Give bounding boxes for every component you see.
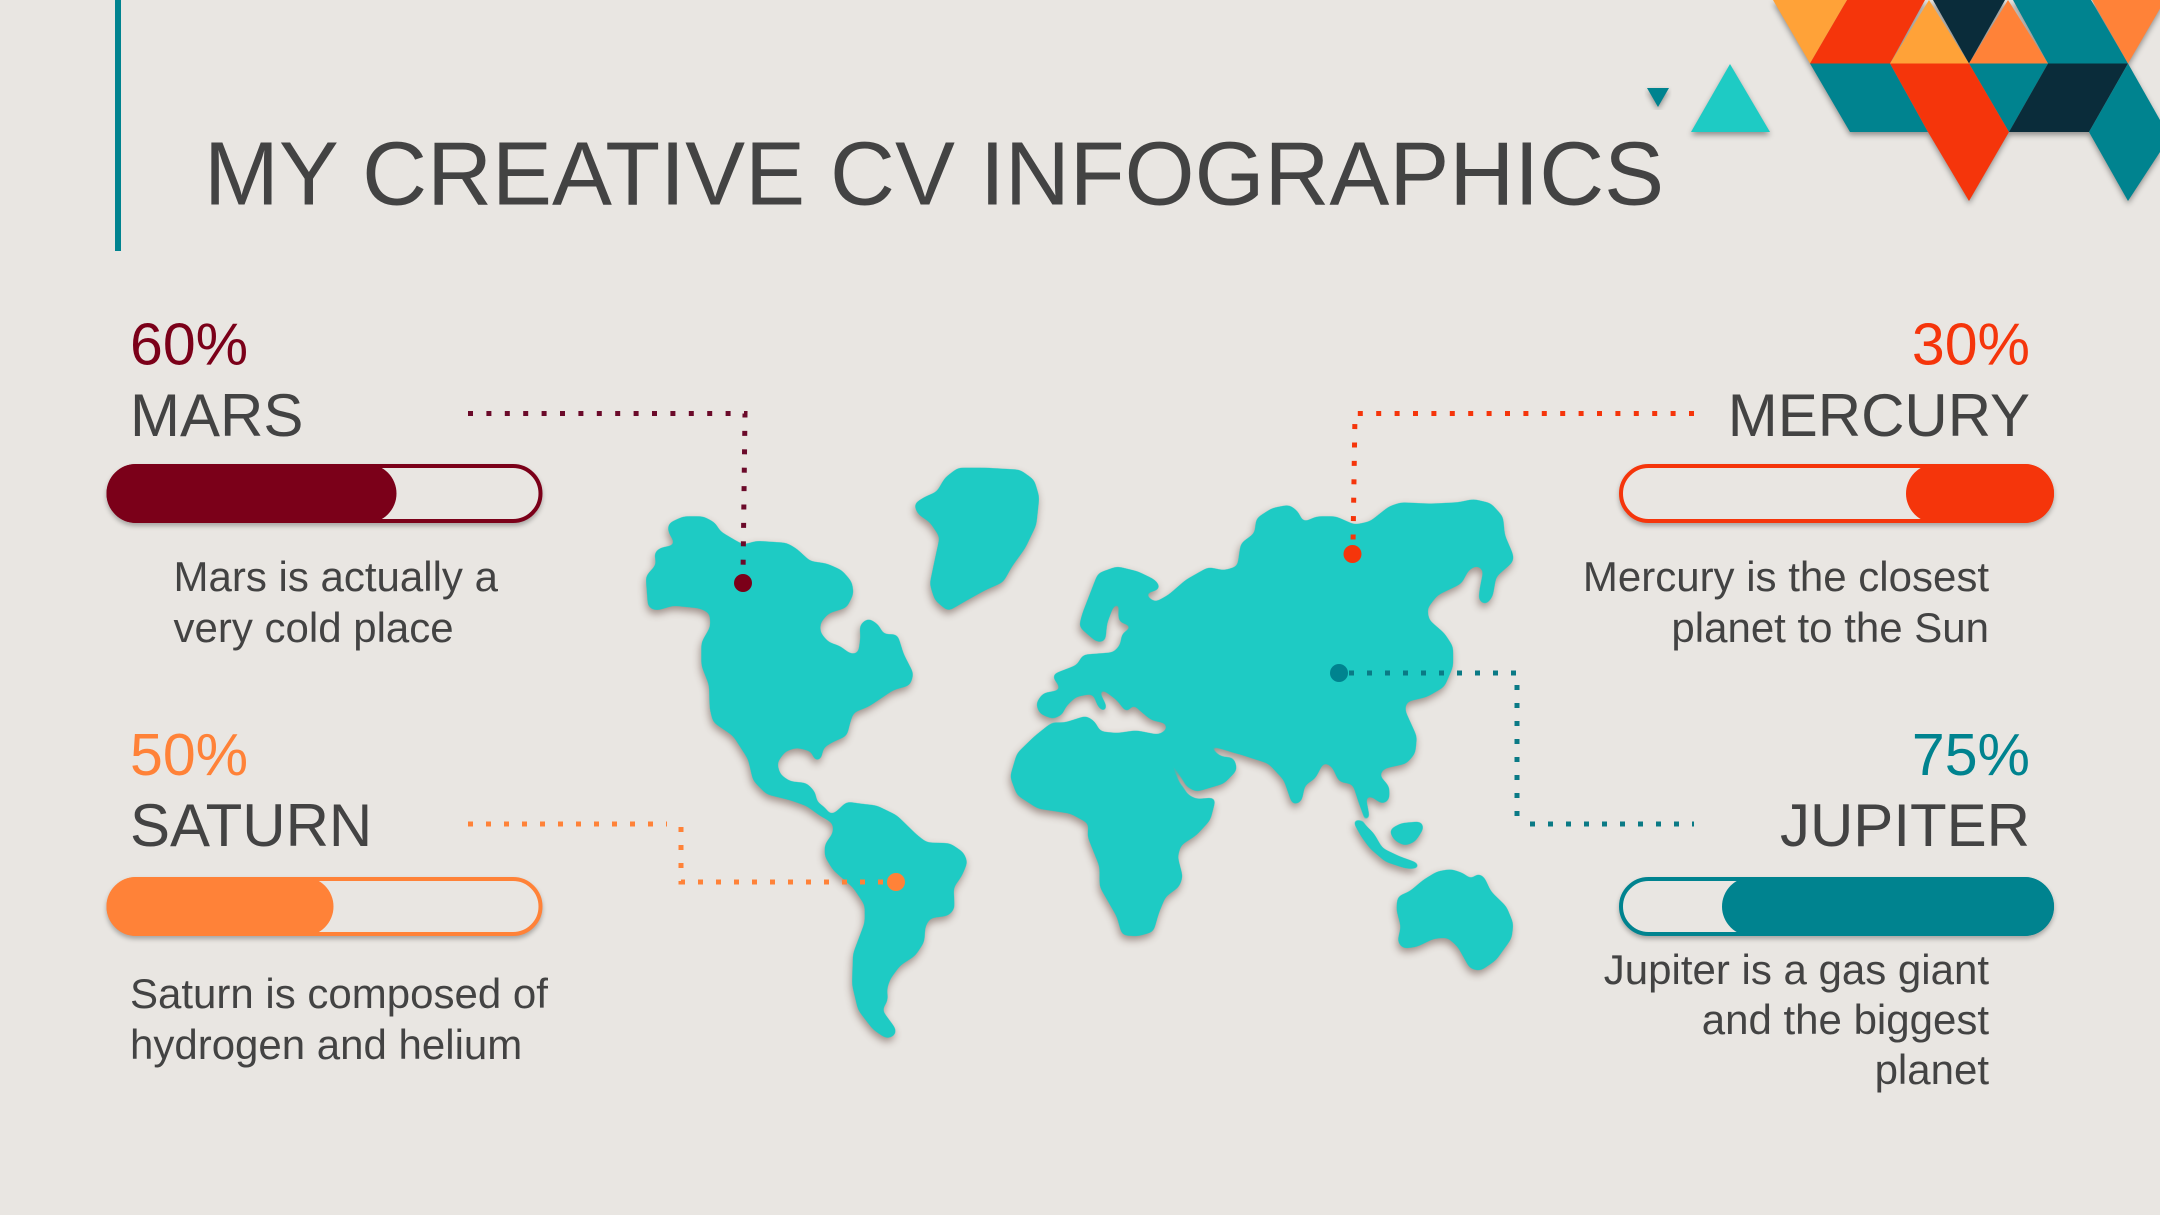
eurasia, africa, australia bbox=[1010, 499, 1513, 971]
icon: turquoise triangle bbox=[1691, 64, 1770, 132]
heading: Mercury: MERCURY bbox=[1728, 382, 2030, 449]
panel: Jupiter bbox=[1604, 722, 2054, 1093]
connector: Saturn bbox=[468, 824, 905, 891]
percentage: Jupiter: 75% bbox=[1912, 722, 2030, 788]
icon: small teal triangle bbox=[1647, 88, 1669, 107]
americas bbox=[646, 517, 967, 1038]
title: MY CREATIVE CV INFOGRAPHICS bbox=[204, 124, 1664, 224]
panel: Jupiter: and the biggest bbox=[1702, 996, 1989, 1043]
description: Mars: Mars is actually a bbox=[174, 553, 499, 600]
description: Jupiter: Jupiter is a gas giant bbox=[1604, 946, 1989, 993]
panel: Mercury bbox=[1583, 312, 2054, 651]
panel: Mercury: planet to the Sun bbox=[1671, 604, 1989, 651]
panel: Jupiter: planet bbox=[1875, 1046, 1989, 1093]
percentage: Mercury: 30% bbox=[1912, 312, 2030, 378]
description: Saturn: Saturn is composed of bbox=[130, 970, 548, 1017]
decorative triangle mosaic bbox=[1773, 0, 2160, 201]
connector: Mars bbox=[468, 414, 752, 592]
panel: Mars bbox=[106, 312, 540, 651]
description: Mercury: Mercury is the closest bbox=[1583, 553, 1989, 600]
connector: Mercury bbox=[1344, 414, 1694, 563]
percentage: Saturn: 50% bbox=[130, 722, 248, 788]
connector: Jupiter bbox=[1330, 664, 1694, 824]
panel: Mars: very cold place bbox=[174, 604, 454, 651]
progress bar: Mars bbox=[106, 464, 540, 523]
heading: Jupiter: JUPITER bbox=[1780, 792, 2030, 859]
progress bar: Jupiter bbox=[1621, 877, 2054, 936]
heading: Saturn: SATURN bbox=[130, 792, 372, 859]
greenland bbox=[914, 468, 1039, 611]
accent bar bbox=[115, 0, 121, 251]
progress bar: Mercury bbox=[1621, 464, 2054, 523]
panel: Saturn: hydrogen and helium bbox=[130, 1021, 522, 1068]
percentage: Mars: 60% bbox=[130, 312, 248, 378]
world map bbox=[646, 468, 1513, 1038]
heading: Mars: MARS bbox=[130, 382, 303, 449]
progress bar: Saturn bbox=[106, 877, 540, 936]
panel: Saturn bbox=[106, 722, 548, 1068]
